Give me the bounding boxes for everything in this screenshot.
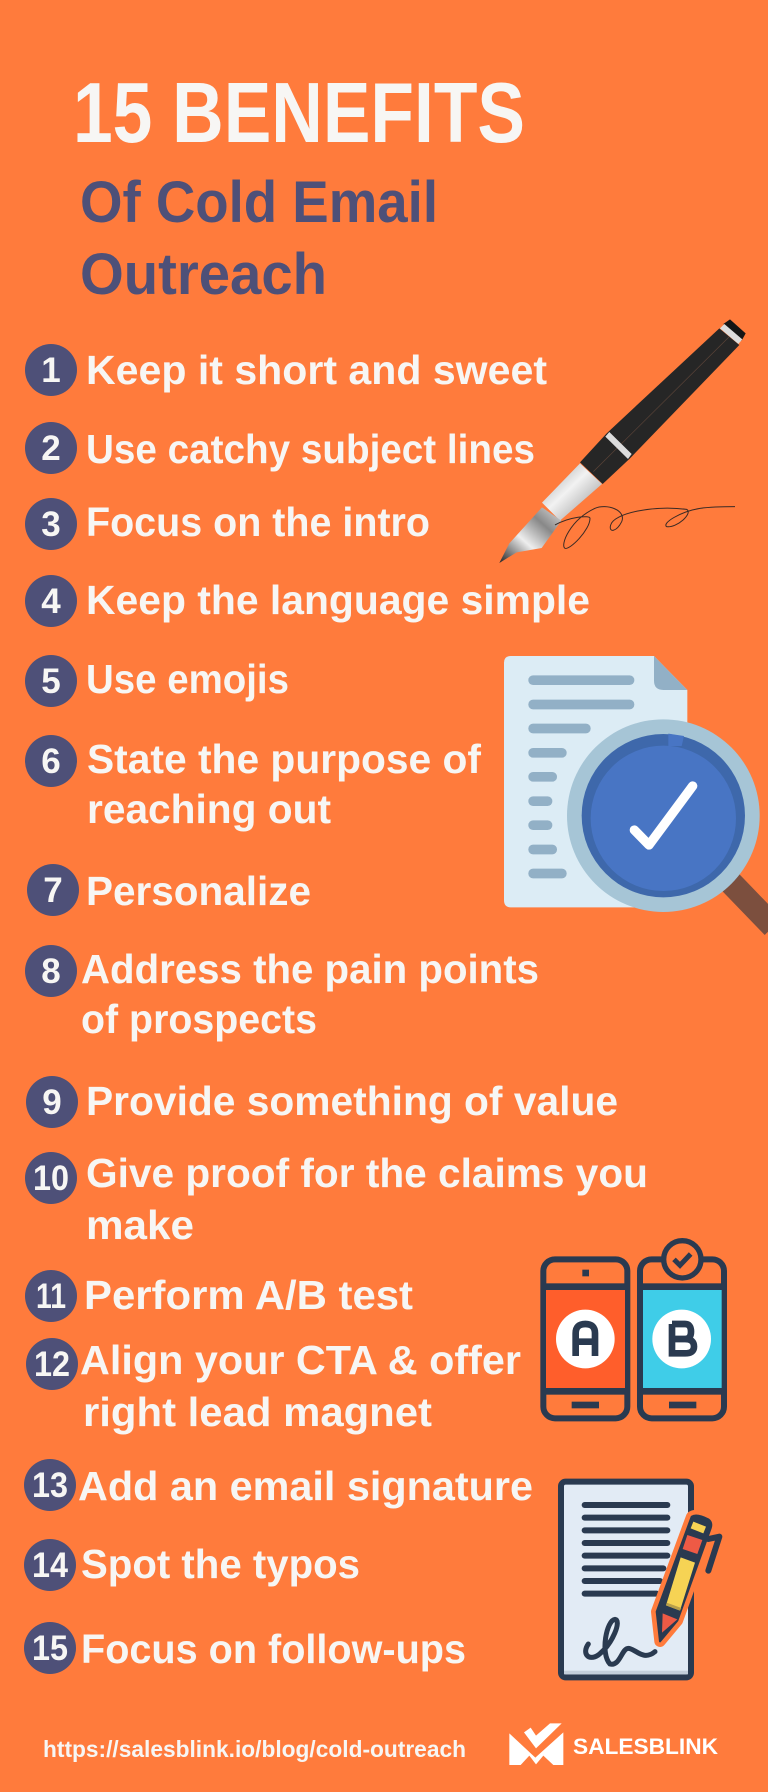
list item 13: Add an email signature bbox=[78, 1463, 533, 1509]
list item 1: Keep it short and sweet bbox=[86, 347, 547, 393]
icon: A/B test phones bbox=[543, 1241, 724, 1418]
list item 4: 4 bbox=[41, 582, 61, 621]
list item 7: Personalize bbox=[86, 868, 311, 914]
list item 3: Focus on the intro bbox=[86, 499, 430, 545]
list item 14: 14 bbox=[32, 1546, 68, 1585]
list item 9: Provide something of value bbox=[86, 1078, 618, 1124]
list item 6: reaching out bbox=[87, 786, 331, 832]
title: Outreach bbox=[80, 242, 327, 307]
list item 11: Perform A/B test bbox=[84, 1272, 413, 1318]
list item 3: 3 bbox=[41, 505, 61, 544]
icon: document with magnifier check bbox=[504, 656, 768, 927]
list item 12 bbox=[26, 1337, 521, 1435]
list item 8: of prospects bbox=[81, 996, 317, 1042]
logo: SalesBlink bbox=[509, 1723, 718, 1765]
list item 10: Give proof for the claims you bbox=[86, 1150, 648, 1196]
list item 1: 1 bbox=[41, 351, 61, 390]
list item 12: Align your CTA & offer bbox=[80, 1337, 521, 1383]
list item 4: Keep the language simple bbox=[86, 577, 590, 623]
list item 15: 15 bbox=[32, 1629, 68, 1668]
icon: fountain pen bbox=[499, 319, 746, 563]
list item 12: 12 bbox=[34, 1345, 70, 1384]
title: Of Cold Email bbox=[80, 170, 438, 235]
list item 2: 2 bbox=[41, 429, 61, 468]
footer url: https://salesblink.io/blog/cold-outreach bbox=[43, 1736, 466, 1762]
list item 8 bbox=[25, 945, 539, 1042]
list item 10 bbox=[25, 1150, 648, 1248]
title bbox=[73, 66, 525, 307]
title: 15 BENEFITS bbox=[73, 66, 525, 161]
list item 7: 7 bbox=[43, 871, 63, 910]
list item 7 bbox=[27, 864, 311, 916]
list item 5: 5 bbox=[41, 662, 61, 701]
logo: SalesBlink: SALESBLINK bbox=[573, 1734, 718, 1759]
list item 6: 6 bbox=[41, 742, 61, 781]
list item 15: Focus on follow-ups bbox=[81, 1626, 466, 1672]
list item 12: right lead magnet bbox=[83, 1389, 432, 1435]
list item 5 bbox=[25, 655, 289, 707]
list item 6: State the purpose of bbox=[87, 736, 481, 782]
list item 9: 9 bbox=[42, 1083, 62, 1122]
list item 10: make bbox=[86, 1202, 194, 1248]
list item 11: 11 bbox=[36, 1277, 66, 1316]
list item 8: 8 bbox=[41, 952, 61, 991]
list item 6 bbox=[25, 735, 481, 832]
list item 8: Address the pain points bbox=[81, 946, 539, 992]
icon: signed document with pen bbox=[561, 1482, 719, 1677]
list item 2: Use catchy subject lines bbox=[86, 426, 535, 472]
list item 10: 10 bbox=[33, 1159, 69, 1198]
list item 13: 13 bbox=[32, 1466, 68, 1505]
list item 14: Spot the typos bbox=[81, 1541, 360, 1587]
list item 5: Use emojis bbox=[86, 656, 289, 702]
